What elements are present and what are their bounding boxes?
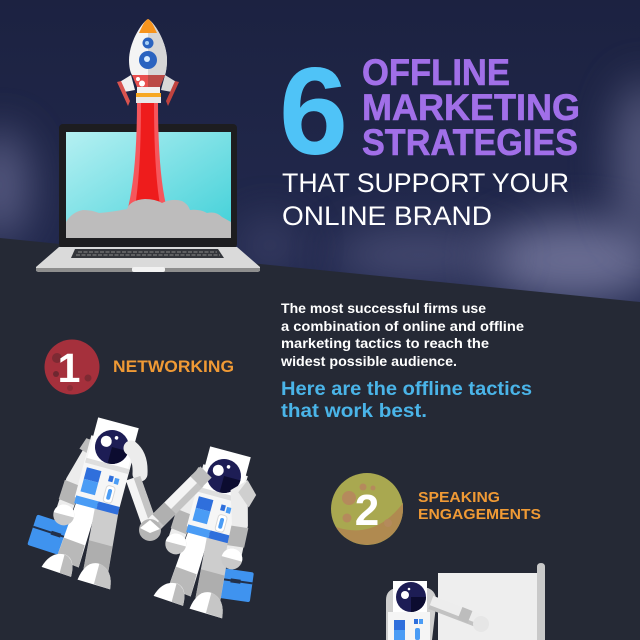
intro text: The most successful firms use (281, 301, 487, 316)
title: MARKETING (362, 87, 580, 128)
title: STRATEGIES (362, 122, 578, 163)
heading: speaking engagements (418, 489, 541, 523)
big number 6: 6 (279, 43, 348, 181)
astronaut team (27, 413, 269, 620)
astronaut right (150, 442, 269, 620)
briefcase right (216, 568, 254, 602)
briefcase left (27, 514, 83, 560)
subtitle (282, 168, 569, 231)
intro text: marketing tactics to reach the (281, 336, 490, 351)
planet 2 (331, 473, 403, 545)
joined arms (131, 448, 206, 541)
laptop (36, 124, 260, 272)
exhaust flame (128, 102, 166, 208)
intro text: widest possible audience. (280, 354, 457, 369)
highlight text: that work best. (281, 401, 427, 422)
title (362, 52, 580, 163)
laptop base (36, 247, 260, 272)
highlight text: Here are the offline tactics (281, 379, 532, 400)
rocket body (129, 19, 167, 75)
planet 1 (44, 340, 100, 394)
planet 2: 2 (355, 486, 379, 535)
rocket (117, 19, 179, 106)
subtitle: THAT SUPPORT YOUR (282, 168, 569, 198)
heading: speaking engagements: ENGAGEMENTS (418, 506, 541, 523)
intro text (280, 301, 525, 369)
smoke cloud (66, 199, 231, 238)
astronaut left (38, 413, 152, 589)
whiteboard (438, 563, 545, 640)
intro text: a combination of online and offline (281, 319, 525, 334)
heading: networking: NETWORKING (113, 357, 234, 376)
title: OFFLINE (362, 52, 510, 93)
laptop screen (59, 124, 237, 248)
rocket fins (117, 75, 179, 106)
presenter astronaut (386, 581, 489, 640)
subtitle: ONLINE BRAND (282, 201, 492, 231)
highlight text (281, 379, 532, 422)
heading: speaking engagements: SPEAKING (418, 489, 500, 506)
planet 1: 1 (58, 345, 80, 391)
